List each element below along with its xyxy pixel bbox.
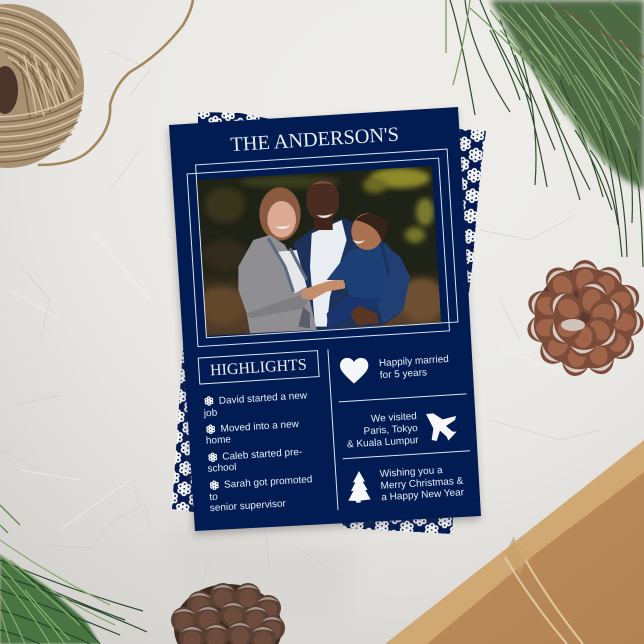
text: travel: Paris, Tokyo xyxy=(363,423,419,437)
text: travel xyxy=(345,411,420,450)
list item: Moved: Moved into a new xyxy=(220,419,300,435)
list item: Caleb xyxy=(207,447,303,475)
icons xyxy=(340,358,457,503)
icon: plane xyxy=(426,413,457,441)
icon: heart xyxy=(340,358,368,384)
list item: Caleb: school xyxy=(207,462,237,475)
text: greeting xyxy=(380,464,465,503)
list item: Sarah: to xyxy=(209,492,219,503)
photo frame: inner xyxy=(196,149,458,338)
child: jacket xyxy=(327,245,388,300)
hands xyxy=(302,278,345,300)
parcel twine xyxy=(505,537,583,644)
text: greeting: Merry Christmas & xyxy=(380,476,464,492)
highlights heading: HIGHLIGHTS xyxy=(210,356,307,379)
list item: David: job xyxy=(203,408,218,419)
list item: Caleb: Caleb started pre- xyxy=(222,447,303,463)
text: married: Happily married xyxy=(379,354,449,369)
child: head xyxy=(351,213,383,250)
list item: David: David started a new xyxy=(219,390,308,407)
list item: Sarah: Sarah got promoted xyxy=(224,474,313,491)
man: hand xyxy=(350,305,378,325)
text: married: for 5 years xyxy=(380,367,427,381)
front card xyxy=(169,107,481,531)
text: greeting: a Happy New Year xyxy=(381,487,465,503)
list item: Moved xyxy=(205,419,301,447)
back card: snowflake pattern xyxy=(172,112,486,534)
card content in card coordinates xyxy=(184,120,473,518)
card face xyxy=(169,107,481,531)
list item: David xyxy=(202,390,309,419)
highlights heading xyxy=(198,351,319,384)
column divider xyxy=(328,349,338,510)
pine branch: top right xyxy=(446,0,644,267)
icon: tree xyxy=(348,471,371,503)
twine ball xyxy=(0,0,193,168)
man: head xyxy=(306,178,339,222)
pine cone: bottom xyxy=(171,583,285,644)
woman: cardigan xyxy=(238,235,317,333)
pine branch: bottom left xyxy=(0,505,147,644)
man: shirt xyxy=(310,220,347,327)
list item: Sarah xyxy=(208,474,314,514)
woman: hair xyxy=(259,187,301,241)
title: THE ANDERSON'S xyxy=(230,124,400,156)
pine cone: right xyxy=(524,260,644,379)
woman: face xyxy=(267,201,296,238)
text: greeting: Wishing you a xyxy=(380,465,443,480)
family photo xyxy=(197,166,441,336)
list item: Moved: home xyxy=(206,434,232,447)
text: married xyxy=(379,354,450,381)
text: travel: & Kuala Lumpur xyxy=(347,435,420,450)
twine string xyxy=(38,0,193,165)
list item: Sarah: senior supervisor xyxy=(210,498,287,514)
text: travel: We visited xyxy=(371,411,417,425)
highlights list xyxy=(202,390,315,514)
child: trousers xyxy=(327,297,383,330)
kraft paper parcel xyxy=(385,440,644,644)
man: jacket xyxy=(293,218,410,330)
photo frame: outer xyxy=(187,158,449,347)
